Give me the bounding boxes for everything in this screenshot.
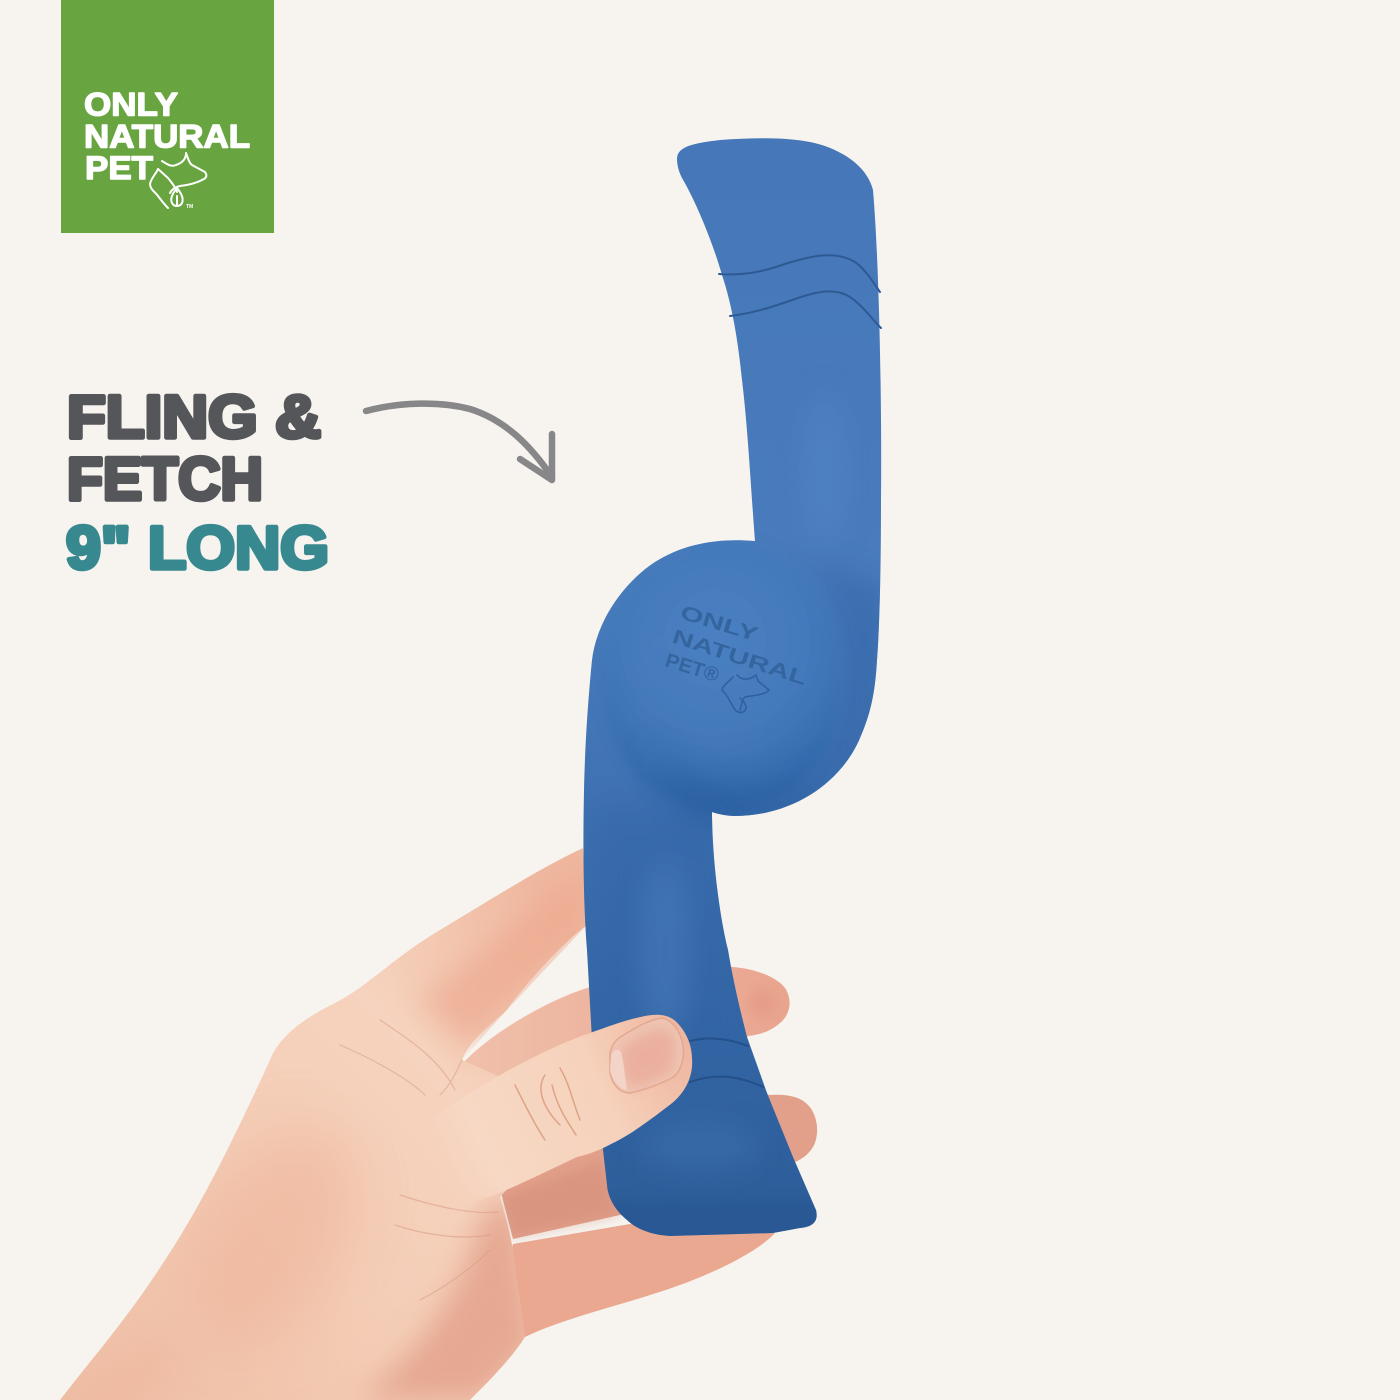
right side shade near ball <box>823 576 880 786</box>
fingertip redness <box>749 989 775 1017</box>
little finger <box>500 1224 775 1337</box>
toe shade <box>612 1199 817 1236</box>
heading line 1: FLING & <box>67 384 321 450</box>
heading line 2: FETCH <box>67 446 263 512</box>
nail bed tint <box>620 1030 675 1088</box>
lower grooves <box>690 1039 763 1087</box>
toy: blue rubber fetch stick <box>583 138 890 1240</box>
shade between fingers <box>500 1160 620 1237</box>
logo badge <box>61 0 274 233</box>
heading: fling and fetch <box>66 384 329 582</box>
logo wordmark <box>84 86 250 186</box>
ball <box>612 540 828 816</box>
ring finger <box>490 1090 817 1239</box>
heading line 3: length: 9" LONG <box>66 514 329 582</box>
lower stem highlight <box>646 889 684 1018</box>
logo wordmark: ONLY <box>84 86 178 122</box>
hand: fingers behind the toy <box>450 960 817 1337</box>
nail moon <box>610 1050 627 1090</box>
upper wave grooves <box>719 255 881 328</box>
thumb nail <box>610 1018 683 1093</box>
logo pet line icon <box>150 153 206 208</box>
palm creases <box>340 1020 498 1300</box>
embossed toy logo: PET® <box>663 650 722 687</box>
logo wordmark: PET <box>85 150 153 186</box>
logo wordmark: NATURAL <box>84 118 250 154</box>
hand: thumb over the toy <box>430 1015 692 1230</box>
embossed toy logo <box>663 602 809 690</box>
middle finger <box>450 960 790 1130</box>
embossed pet icon <box>722 675 769 712</box>
upper stem highlight <box>799 390 851 550</box>
palm lower shadow <box>196 884 586 1400</box>
logo trademark: TM <box>186 204 193 210</box>
lower stem shade <box>591 822 754 1055</box>
hand: palm and index finger <box>48 848 590 1400</box>
embossed toy logo: NATURAL <box>669 626 809 690</box>
ball underside shadow <box>712 778 832 831</box>
arrow pointing to toy <box>366 404 552 480</box>
thumb knuckle creases <box>515 1068 580 1140</box>
embossed toy logo: ONLY <box>678 602 761 646</box>
